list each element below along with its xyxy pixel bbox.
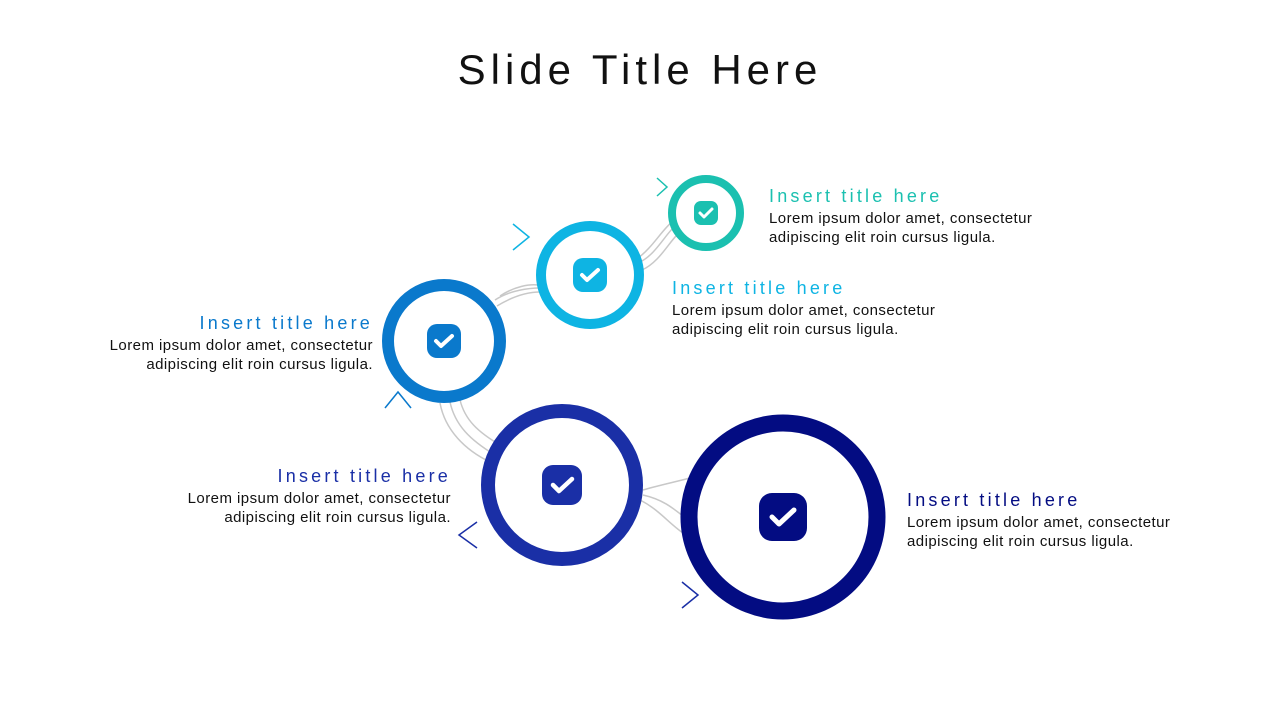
text: Lorem ipsum dolor amet, consectetur xyxy=(769,210,1032,227)
circle 2 light blue xyxy=(541,226,639,324)
circle 1 teal xyxy=(672,179,740,247)
text: adipiscing elit roin cursus ligula. xyxy=(769,229,996,246)
circle 3 blue xyxy=(388,285,500,397)
text: Insert title here xyxy=(672,278,845,298)
circle 5 navy xyxy=(689,423,877,611)
text: Insert title here xyxy=(769,186,942,206)
text: adipiscing elit roin cursus ligula. xyxy=(672,321,899,338)
text: step 3 xyxy=(110,313,373,373)
text: Insert title here xyxy=(278,466,451,486)
text: step 4 xyxy=(188,466,451,526)
title: Slide Title Here xyxy=(458,46,822,93)
circle 4 indigo xyxy=(488,411,636,559)
arrow chevrons xyxy=(385,178,698,608)
text: Lorem ipsum dolor amet, consectetur xyxy=(110,337,373,354)
text: Insert title here xyxy=(907,490,1080,510)
text: adipiscing elit roin cursus ligula. xyxy=(224,509,451,526)
text: Lorem ipsum dolor amet, consectetur xyxy=(907,514,1170,531)
text: step 2 xyxy=(672,278,935,338)
text: Lorem ipsum dolor amet, consectetur xyxy=(672,302,935,319)
text: step 1 xyxy=(769,186,1032,246)
text: adipiscing elit roin cursus ligula. xyxy=(146,356,373,373)
text: step 5 xyxy=(907,490,1170,550)
text: Lorem ipsum dolor amet, consectetur xyxy=(188,490,451,507)
text: adipiscing elit roin cursus ligula. xyxy=(907,533,1134,550)
connector lines xyxy=(440,222,690,535)
text: Insert title here xyxy=(200,313,373,333)
